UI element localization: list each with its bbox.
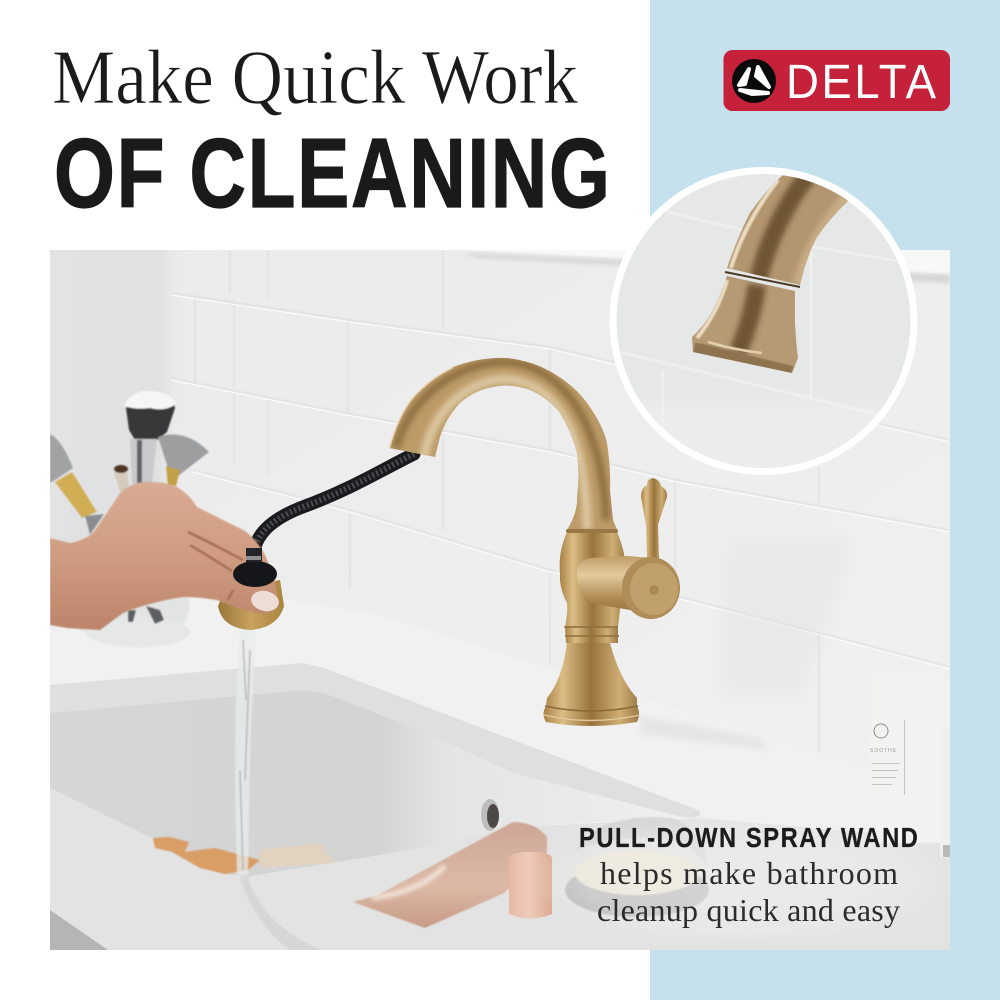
faucet shadow on counter: [642, 718, 763, 747]
wall shelf edge: [460, 250, 950, 274]
grey brush: [50, 434, 73, 482]
tube highlight: [372, 866, 445, 898]
thumb nail: [251, 590, 279, 612]
inset spray head: [685, 270, 805, 380]
overflow drain: [481, 799, 499, 831]
hose: [252, 451, 420, 548]
faucet handle lever: [641, 478, 667, 558]
faucet spout: [389, 358, 618, 532]
inset spout: [720, 160, 880, 290]
caption line 2: cleanup quick and easy: [597, 892, 900, 928]
fan brush: [158, 435, 209, 476]
hand: [50, 482, 277, 630]
title line 1: Make Quick Work: [52, 34, 578, 120]
logo badge: [724, 50, 950, 111]
tube cap: [509, 852, 552, 918]
makeup brushes in glass: [50, 391, 209, 648]
faucet handle hub: [576, 556, 646, 610]
finger creases: [188, 532, 243, 600]
overflow drain hole: [487, 804, 499, 828]
inset photo: [610, 160, 920, 480]
sink basin: [50, 690, 548, 877]
faucet handle cap: [622, 557, 680, 619]
sink rim: [50, 663, 700, 818]
caption line 1: helps make bathroom: [600, 855, 898, 891]
title line 2: OF CLEANING: [54, 119, 610, 228]
faucet collar: [566, 529, 618, 533]
photo: bathroom sink with faucet: [50, 250, 960, 950]
blue side panel: [650, 0, 1000, 1000]
faucet rings: [565, 627, 618, 643]
small brush: [113, 466, 129, 492]
caption: [579, 823, 918, 928]
cosmetics group: [353, 817, 709, 928]
text haze: [530, 814, 960, 946]
Delta logo: [724, 50, 950, 111]
foreground counter: [50, 788, 950, 950]
water stream: [235, 639, 254, 875]
cosmetic jar: [870, 720, 950, 858]
makeup tube: [353, 822, 547, 928]
inset ring: [610, 167, 918, 475]
cosmetic jar: SOOTHE: [870, 748, 897, 754]
makeup smear: [153, 837, 336, 874]
bowl curve shadow: [240, 877, 322, 950]
inset seam: [725, 272, 800, 287]
faucet base: [544, 643, 639, 726]
counter top: [50, 624, 870, 833]
zoom inset: spout close-up: [610, 160, 920, 480]
faucet wall shadow: [732, 612, 814, 634]
dark corner: [50, 910, 108, 950]
caption heading: PULL-DOWN SPRAY WAND: [579, 823, 918, 853]
tiled wall: [50, 250, 950, 810]
spray wand: [218, 580, 284, 630]
glass cup: [74, 502, 190, 632]
black and white brush: [125, 404, 176, 440]
logo mark: [732, 59, 776, 103]
faucet: [380, 350, 680, 726]
compact: [565, 817, 709, 917]
logo wordmark: DELTA: [786, 55, 937, 108]
wand collar: [233, 548, 277, 587]
faucet body: [560, 532, 626, 627]
title: [52, 34, 610, 228]
inset tile lines: [620, 210, 920, 470]
